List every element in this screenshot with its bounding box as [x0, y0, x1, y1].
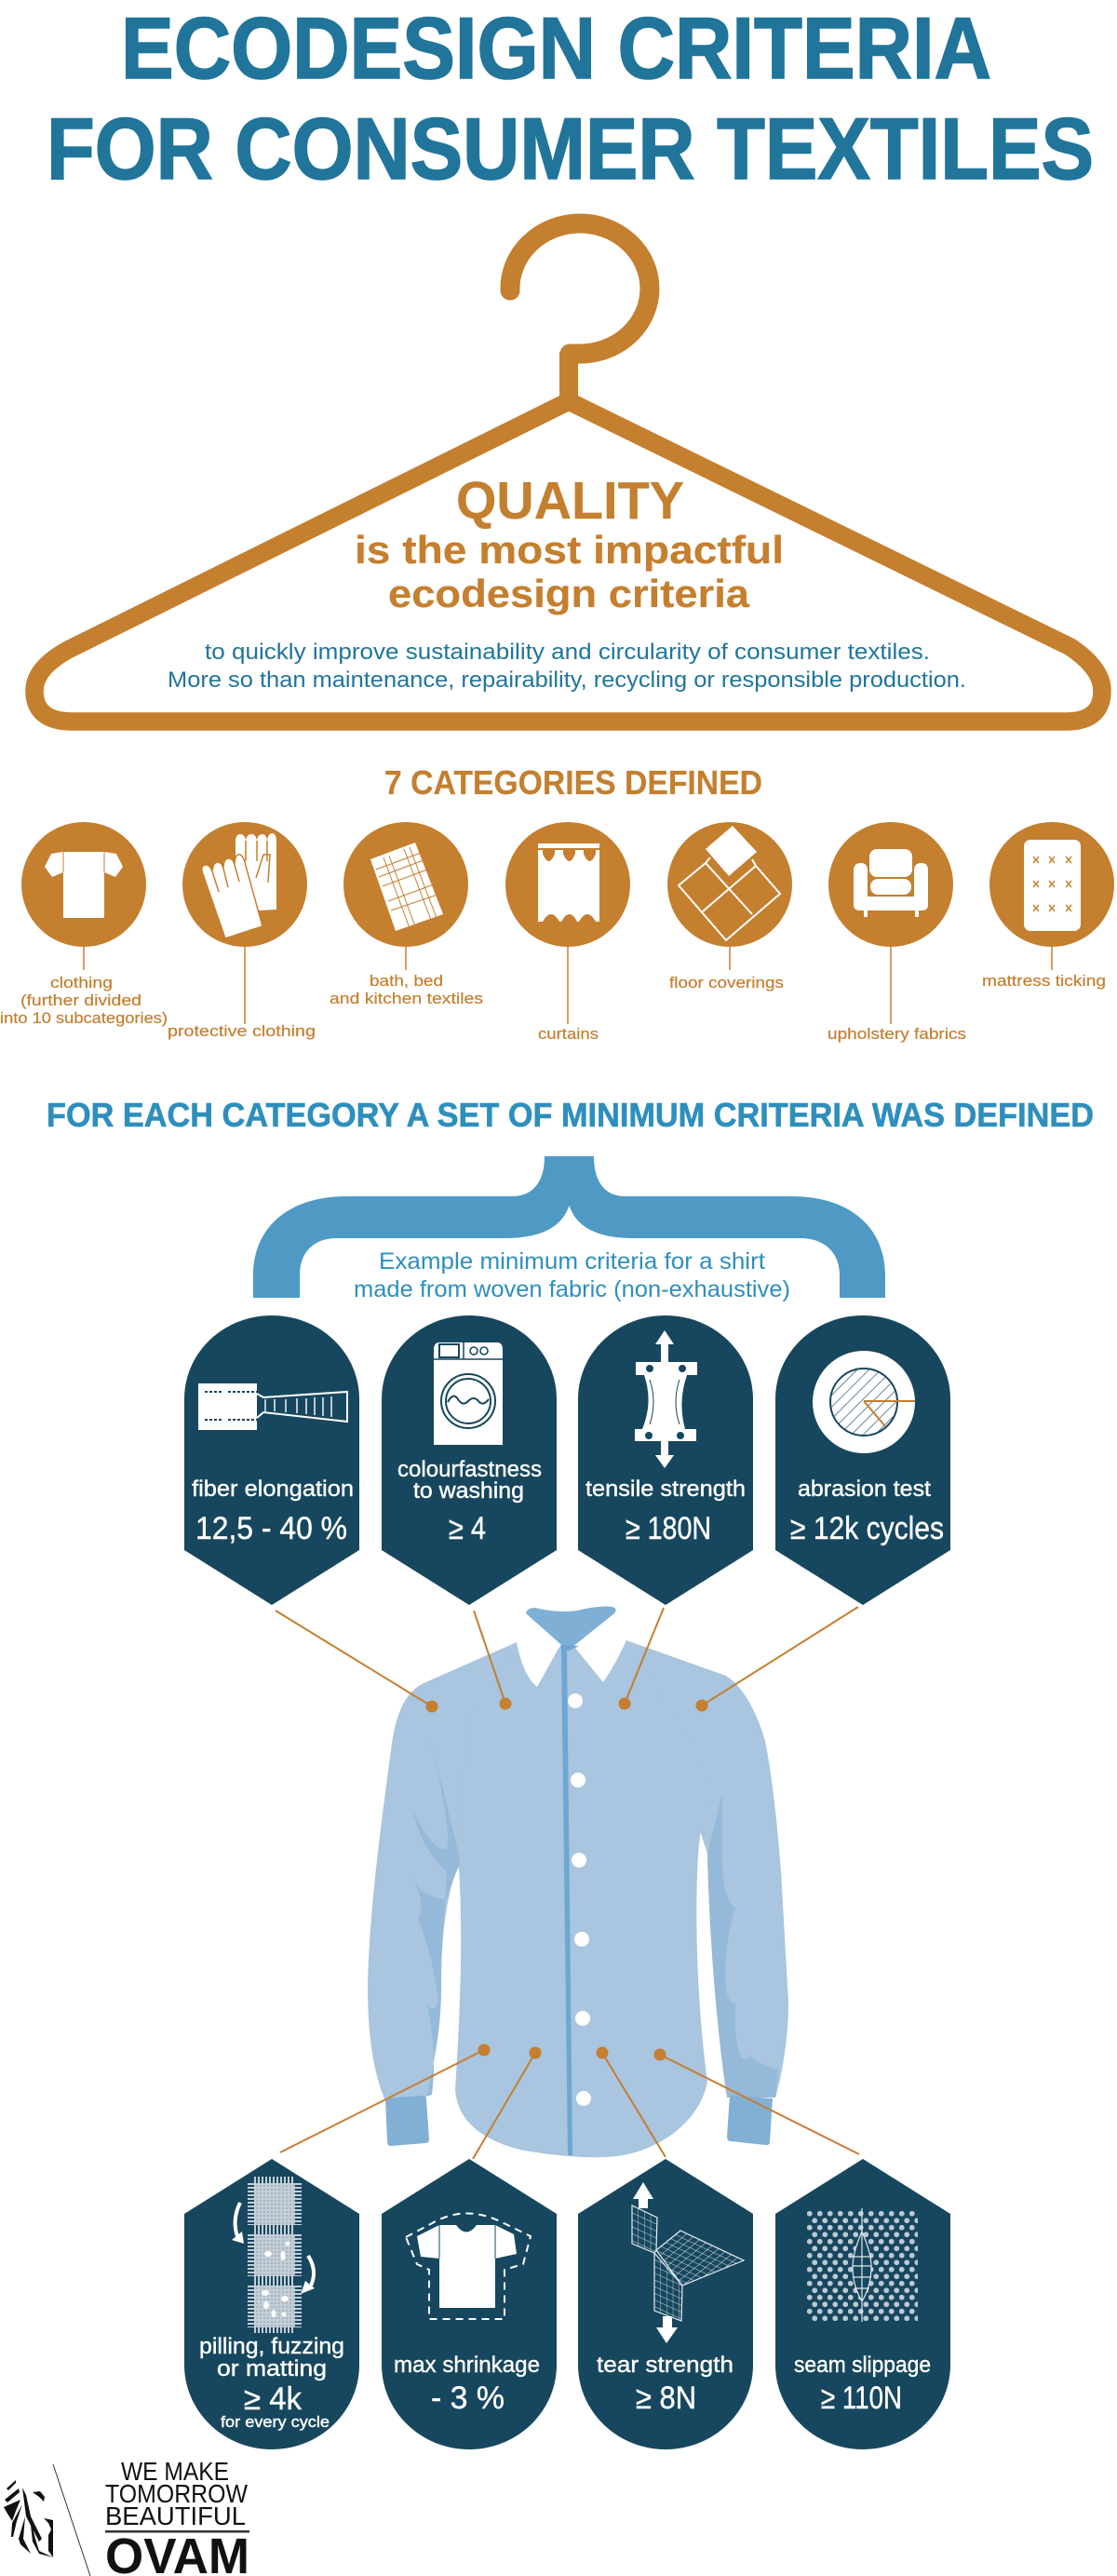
- text block: example note: made from woven fabric (non-exhaustive): [354, 1276, 790, 1302]
- panel: max shrinkage: max shrinkage: [394, 2353, 540, 2378]
- heading: minimum criteria: FOR EACH CATEGORY A SET OF MINIMUM CRITERIA WAS DEFINED: [47, 1096, 1094, 1134]
- category: protective clothing: protective clothing: [168, 1022, 316, 1040]
- shirt: inner collar: [526, 1607, 616, 1651]
- panel: pilling, fuzzing or matting: pilling, fuzzing: [199, 2334, 344, 2359]
- text block: example note: Example minimum criteria for a shirt: [379, 1248, 765, 1275]
- text block: quality explanation: More so than maintenance, repairability, recycling or responsible production.: [168, 668, 966, 693]
- category: upholstery fabrics: [828, 822, 966, 1043]
- shirt: cuffs: [385, 2096, 773, 2146]
- icon: pilling fabric: [232, 2183, 315, 2327]
- icon: coat hanger: [34, 223, 1102, 722]
- title: ECODESIGN CRITERIA: [121, 0, 991, 97]
- text: slogan: TOMORROW: [105, 2479, 248, 2508]
- panel: fiber elongation: 12,5 - 40 %: [195, 1511, 347, 1546]
- panel: tear strength: ≥ 8N: [636, 2380, 696, 2416]
- category: bath, bed and kitchen textiles: bath, bed: [370, 972, 443, 990]
- category: protective clothing: [168, 822, 316, 1040]
- icon: seam with dots: [807, 2208, 918, 2322]
- shirt: sleeve folds: [412, 1741, 778, 2097]
- text block: quality statement: [355, 471, 784, 615]
- panel: seam slippage: [775, 2159, 950, 2449]
- panel: colourfastness to washing: [382, 1315, 557, 1605]
- panel: abrasion test: ≥ 12k cycles: [790, 1511, 944, 1546]
- panel: categories: [0, 822, 1114, 1043]
- shirt: placket: [560, 1645, 579, 2155]
- category: floor coverings: [667, 822, 792, 991]
- category: bath, bed and kitchen textiles: and kitchen textiles: [330, 990, 483, 1007]
- heading: 7 categories defined: 7 CATEGORIES DEFINED: [384, 763, 762, 802]
- category: clothing: into 10 subcategories): [0, 1009, 168, 1027]
- category: upholstery fabrics: upholstery fabrics: [828, 1025, 966, 1043]
- panel: max shrinkage: - 3 %: [431, 2380, 505, 2416]
- connectors: upper criteria to shirt: [276, 1607, 858, 1713]
- connectors: lower criteria to shirt: [280, 2044, 859, 2159]
- panel: fiber elongation: fiber elongation: [192, 1477, 354, 1502]
- panel: tensile strength: tensile strength: [585, 1477, 746, 1502]
- panel: seam slippage: seam slippage: [794, 2353, 931, 2378]
- text block: quality explanation: to quickly improve sustainability and circularity of consumer textiles.: [205, 640, 930, 665]
- text block: quality statement: ecodesign criteria: [388, 572, 750, 615]
- title: [47, 0, 1094, 197]
- panel: tensile strength: ≥ 180N: [626, 1511, 711, 1546]
- category: bath, bed and kitchen textiles: [330, 822, 483, 1007]
- panel: colourfastness to washing: colourfastness: [397, 1457, 542, 1482]
- category: clothing: clothing: [50, 974, 113, 991]
- panel: pilling, fuzzing or matting: [184, 2159, 359, 2449]
- panel: colourfastness to washing: ≥ 4: [449, 1511, 486, 1546]
- category: mattress ticking: [982, 822, 1114, 990]
- panel: pilling, fuzzing or matting: for every cycle: [221, 2413, 330, 2431]
- panel: colourfastness to washing: to washing: [413, 1478, 524, 1504]
- panel: tear strength: [578, 2159, 753, 2449]
- panel: tensile strength: [578, 1315, 753, 1605]
- category: curtains: [505, 822, 630, 1043]
- icon: abrasion disc: [813, 1351, 915, 1453]
- text block: quality explanation: [168, 640, 966, 693]
- icon: curly brace: [253, 1156, 885, 1298]
- icon: lion: [4, 2480, 53, 2557]
- text: slogan: WE MAKE: [121, 2457, 229, 2486]
- shirt: sleeves: [368, 1640, 788, 2100]
- text block: quality statement: is the most impactful: [355, 528, 784, 572]
- panel: tear strength: tear strength: [597, 2353, 733, 2378]
- panel: abrasion test: [775, 1315, 950, 1605]
- panel: fiber elongation: [184, 1315, 359, 1605]
- illustration: shirt: [368, 1607, 788, 2157]
- text block: example note: [354, 1248, 790, 1302]
- shirt: buttons: [568, 1693, 591, 2106]
- category: mattress ticking: mattress ticking: [982, 972, 1106, 990]
- icon: tensile test: [635, 1330, 697, 1468]
- text: slogan: BEAUTIFUL: [105, 2502, 246, 2530]
- category: clothing: (further divided: [20, 991, 141, 1009]
- icon: tearing fabric: [632, 2182, 744, 2343]
- panel: abrasion test: abrasion test: [798, 1477, 931, 1502]
- text block: quality statement: QUALITY: [456, 471, 684, 531]
- panel: max shrinkage: [382, 2159, 557, 2449]
- icon: shrinking t-shirt: [406, 2214, 531, 2319]
- icon: washing machine: [434, 1342, 503, 1445]
- panel: pilling, fuzzing or matting: or matting: [217, 2356, 327, 2381]
- category: floor coverings: floor coverings: [669, 974, 784, 991]
- panel: seam slippage: ≥ 110N: [821, 2380, 902, 2416]
- logo: Flemish lion and OVAM: [4, 2457, 249, 2576]
- panel: pilling, fuzzing or matting: ≥ 4k: [244, 2381, 303, 2417]
- shirt: body: [455, 1640, 707, 2157]
- category: clothing: [0, 822, 168, 1027]
- category: curtains: curtains: [538, 1025, 599, 1043]
- text: slogan: [105, 2457, 248, 2530]
- icon: fiber elongation: [198, 1383, 347, 1430]
- shirt: collar leaves: [517, 1625, 626, 1687]
